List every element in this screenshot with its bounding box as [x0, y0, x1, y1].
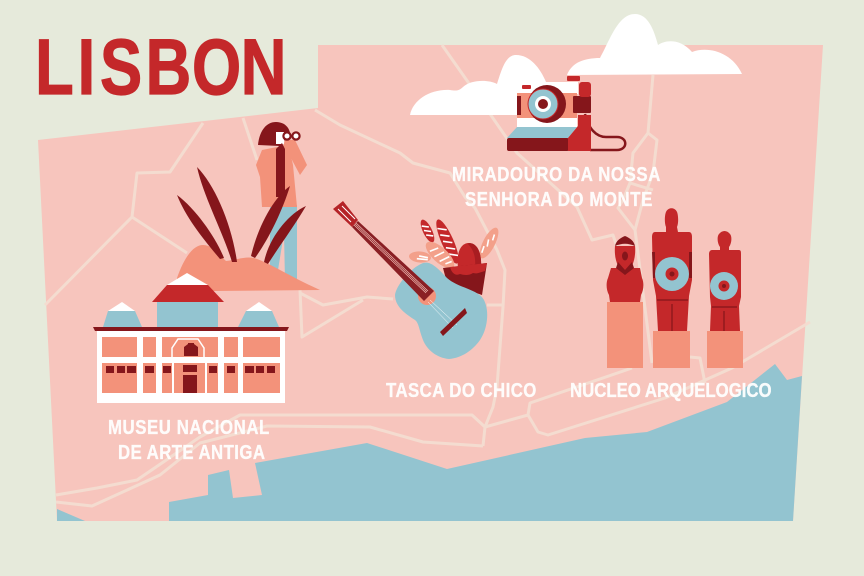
right tower — [238, 311, 279, 327]
label: museu line 2: DE ARTE ANTIGA — [118, 441, 265, 463]
hip line and slit — [712, 307, 737, 331]
label: miradouro line 2: SENHORA DO MONTE — [465, 188, 652, 210]
tuners — [338, 206, 355, 222]
hair — [258, 122, 290, 146]
icon: statues — [607, 208, 743, 368]
torso — [256, 147, 297, 207]
roof band — [93, 327, 289, 331]
right cloud — [567, 14, 742, 75]
lens outer — [528, 85, 566, 123]
panel: map land — [38, 45, 823, 521]
neck — [352, 221, 434, 301]
scarf — [276, 143, 285, 197]
target — [710, 272, 738, 300]
left cloud — [410, 55, 560, 115]
camera red panel — [568, 115, 591, 151]
target centre — [722, 284, 726, 288]
arm shadow — [652, 252, 692, 278]
flash top — [567, 76, 580, 81]
panel: water — [169, 364, 802, 521]
target inner — [718, 280, 730, 292]
camera flash — [579, 82, 591, 97]
map roads — [45, 45, 810, 506]
bridge — [440, 308, 467, 336]
white facade — [97, 331, 285, 403]
left tower cap — [108, 302, 135, 311]
left tower — [103, 311, 142, 327]
lens blue ring — [528, 89, 558, 119]
right tower cap — [246, 302, 272, 311]
bust collar — [616, 262, 634, 275]
icon: camera — [507, 76, 625, 151]
guitar body — [395, 263, 487, 359]
camera side grip — [517, 96, 521, 115]
lens centre — [538, 99, 548, 109]
label: miradouro line 1: MIRADOURO DA NOSSA — [452, 163, 660, 185]
windows — [102, 337, 280, 393]
legs — [270, 205, 297, 281]
baguette middle — [422, 237, 458, 273]
statue 3 — [709, 231, 741, 331]
figure — [652, 208, 692, 331]
bust head — [615, 246, 635, 274]
dark openings — [106, 343, 275, 393]
pediment outline — [172, 339, 204, 357]
loaf shadow — [468, 243, 481, 268]
bust nose — [622, 252, 628, 260]
bag — [443, 263, 487, 295]
strings over body — [428, 300, 457, 328]
target centre — [670, 272, 674, 276]
strings — [354, 223, 428, 293]
roll left — [409, 251, 431, 263]
camera white strip — [517, 118, 577, 127]
red roof — [152, 285, 224, 302]
baguette tall — [432, 217, 463, 266]
icon: plant on hill — [177, 167, 320, 291]
lens white ring — [535, 96, 551, 112]
label: tasca do chico: TASCA DO CHICO — [386, 379, 536, 401]
icon: museum — [93, 273, 289, 403]
leaves — [177, 167, 306, 264]
label: nucleo arqueologico: NUCLEO ARQUELOGICO — [570, 379, 772, 401]
bust body — [607, 268, 643, 302]
hip line and slit — [657, 300, 688, 331]
baguette far left — [418, 218, 437, 244]
loaf — [458, 243, 481, 268]
clouds — [410, 14, 742, 115]
icon: person with binoculars — [256, 122, 307, 281]
face — [276, 132, 284, 144]
hill — [177, 245, 320, 291]
arm — [283, 140, 307, 175]
camera band — [517, 93, 577, 118]
pedestals — [607, 302, 743, 368]
centre block — [157, 302, 218, 328]
figure — [709, 231, 741, 331]
icon: guitar — [333, 201, 487, 359]
icon: bread bag — [409, 217, 502, 295]
headstock — [333, 201, 358, 227]
statue 1 — [607, 236, 643, 302]
camera dark box — [573, 96, 591, 113]
bust cap — [615, 236, 635, 246]
baguette right — [476, 225, 502, 261]
statue 2 — [652, 208, 692, 331]
shutter button — [522, 85, 531, 89]
sound hole — [418, 287, 436, 305]
camera blue slope — [507, 127, 577, 138]
small water inlet — [57, 509, 85, 521]
camera base — [507, 138, 569, 151]
roof cap — [167, 273, 208, 285]
camera cable — [585, 114, 625, 150]
camera top — [522, 82, 578, 94]
target inner — [666, 268, 678, 280]
bag rim — [450, 263, 487, 275]
binoculars — [283, 132, 300, 140]
label: museu line 1: MUSEU NACIONAL — [108, 416, 269, 438]
title: LISBON — [35, 23, 286, 112]
target — [655, 257, 689, 291]
